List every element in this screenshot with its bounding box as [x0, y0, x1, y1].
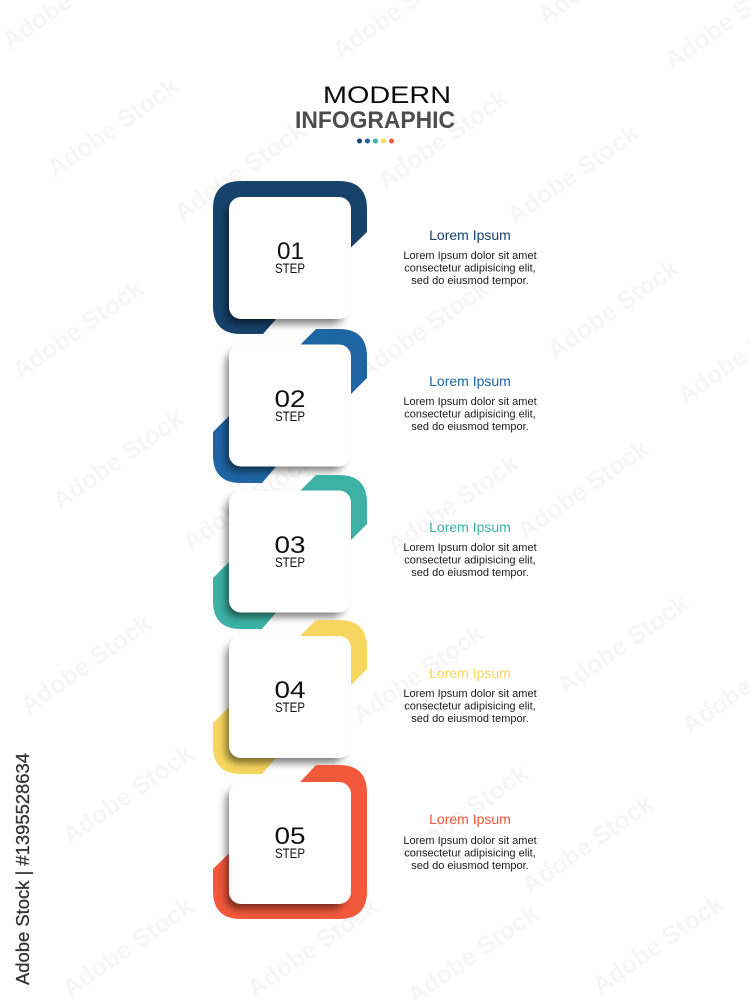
step 3 description: consectetur adipisicing elit, — [404, 554, 536, 566]
step 4 description: sed do eiusmod tempor. — [411, 713, 529, 725]
step 2 number: 02 — [274, 386, 306, 413]
step 5 card — [226, 782, 351, 909]
background watermark: Adobe Stock — [502, 119, 644, 230]
step 1 description: Lorem Ipsum dolor sit amet — [403, 250, 537, 262]
stock credit: Adobe Stock | #1395528634 — [13, 753, 33, 985]
step 1 description: Lorem Ipsum — [429, 227, 511, 243]
step 5 description: sed do eiusmod tempor. — [411, 860, 529, 872]
step 1 label: STEP — [275, 261, 305, 276]
step 3 description: Lorem Ipsum — [429, 519, 511, 535]
step 3 label: STEP — [275, 555, 305, 570]
step 2 description: Lorem Ipsum dolor sit amet — [403, 396, 537, 408]
background watermark: Adobe Stock — [177, 446, 319, 557]
step 5 description: consectetur adipisicing elit, — [404, 848, 536, 860]
step 2 description: Lorem Ipsum — [429, 373, 511, 389]
step 1 — [213, 181, 367, 334]
background watermark: Adobe Stock — [7, 274, 149, 385]
step 4 ribbon — [213, 620, 367, 774]
step 2 card — [226, 344, 351, 471]
step 3 description: sed do eiusmod tempor. — [411, 567, 529, 579]
step 4 description: Lorem Ipsum — [429, 665, 511, 681]
step 4 card — [226, 636, 351, 763]
background watermark: Adobe Stock — [392, 759, 534, 870]
step 3 description — [403, 519, 537, 579]
background watermark: Adobe Stock — [347, 619, 489, 730]
background watermark: Adobe Stock — [57, 892, 199, 1000]
background watermark: Adobe Stock — [42, 72, 184, 183]
step 3 description: Lorem Ipsum dolor sit amet — [403, 542, 537, 554]
step 3 — [213, 475, 367, 629]
step 2 ribbon — [213, 329, 367, 483]
step 5 description: Lorem Ipsum dolor sit amet — [403, 835, 537, 847]
title colour dots — [357, 138, 394, 144]
background watermark: Adobe Stock — [517, 789, 659, 900]
step 5 — [213, 765, 367, 919]
step 5 ribbon — [213, 765, 367, 919]
step 3 ribbon — [213, 475, 367, 629]
background watermark: Adobe Stock — [542, 254, 684, 365]
step 4 description — [403, 665, 537, 725]
step 1 description: consectetur adipisicing elit, — [404, 262, 536, 274]
step 1 card — [226, 197, 351, 324]
step 1 ribbon — [213, 181, 367, 334]
title — [295, 82, 455, 134]
step 3 card — [226, 490, 351, 617]
step 2 description: consectetur adipisicing elit, — [404, 408, 536, 420]
title: INFOGRAPHIC — [295, 107, 455, 134]
background watermark: Adobe Stock — [169, 116, 311, 227]
background watermark: Adobe Stock — [47, 404, 189, 515]
background watermark: Adobe Stock — [352, 274, 494, 385]
step 4 description: consectetur adipisicing elit, — [404, 700, 536, 712]
background watermark: Adobe Stock — [372, 84, 514, 195]
step 4 — [213, 620, 367, 774]
background watermark: Adobe Stock — [587, 889, 729, 1000]
step 3 number: 03 — [274, 532, 306, 559]
step 5 description: Lorem Ipsum — [429, 811, 511, 827]
step 5 description — [403, 811, 537, 872]
step 5 label: STEP — [275, 846, 305, 861]
step 2 — [213, 329, 367, 483]
step 2 description — [403, 373, 537, 433]
step 4 number: 04 — [274, 677, 306, 704]
background watermark: Adobe Stock — [382, 449, 524, 560]
step 2 description: sed do eiusmod tempor. — [411, 421, 529, 433]
background watermark: Adobe Stock — [242, 892, 384, 1000]
background watermark: Adobe Stock — [552, 589, 694, 700]
step 2 label: STEP — [275, 409, 305, 424]
step 1 number: 01 — [277, 238, 304, 265]
step 1 description: sed do eiusmod tempor. — [411, 275, 529, 287]
step 5 number: 05 — [274, 823, 306, 850]
background watermark: Adobe Stock — [15, 609, 157, 720]
background watermark: Adobe Stock — [512, 434, 654, 545]
background watermark: Adobe Stock — [57, 739, 199, 850]
step 4 label: STEP — [275, 700, 305, 715]
title: MODERN — [323, 82, 451, 109]
step 1 description — [403, 227, 537, 287]
step 4 description: Lorem Ipsum dolor sit amet — [403, 688, 537, 700]
